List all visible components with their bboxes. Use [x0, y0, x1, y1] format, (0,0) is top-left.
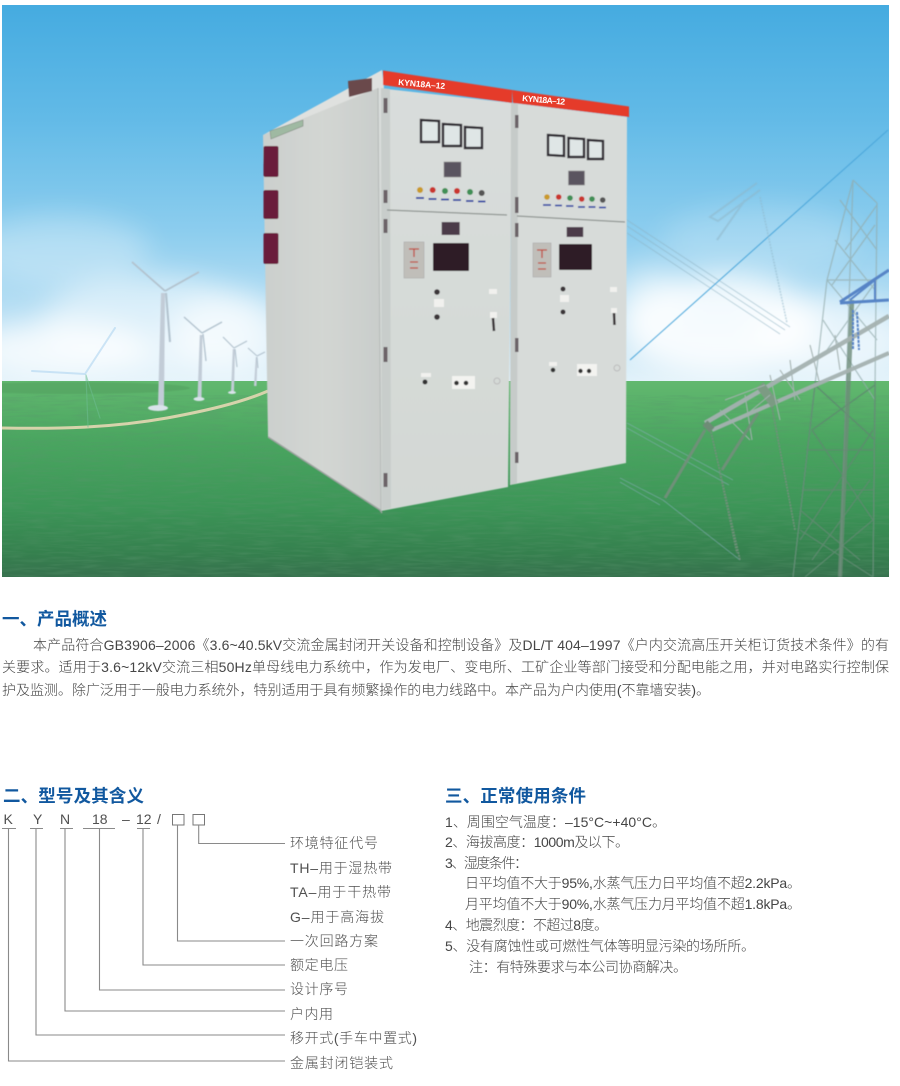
indicator lamps panel 1 [416, 187, 486, 202]
top vent [348, 78, 372, 97]
meaning labels: 移开式(手车中置式) [290, 1030, 417, 1046]
clouds [0, 205, 900, 378]
lattice tower, sky part [793, 180, 877, 577]
indicator lamps panel 2 [543, 194, 606, 208]
turbine 4 [248, 348, 265, 386]
distant hill [0, 382, 190, 394]
overview paragraph: 本产品符合GB3906–2006《3.6~40.5kV交流金属封闭开关设备和控制设备》及DL/T 404–1997《户内交流高压开关柜订货技术条件》的有 [33, 637, 889, 653]
meaning labels: 额定电压 [290, 957, 348, 973]
product: switchgear cabinet [263, 70, 629, 513]
conditions list [445, 814, 801, 975]
model code: N [60, 811, 70, 827]
knobs and handles [434, 286, 617, 331]
meaning labels [290, 835, 417, 1071]
model code: 12 [136, 811, 152, 827]
section 1: product overview [2, 609, 889, 698]
model code: 18 [92, 811, 108, 827]
turbine 2 [184, 317, 222, 401]
conditions list: 5、没有腐蚀性或可燃性气体等明显污染的场所所。 [445, 938, 755, 954]
blue wire [630, 130, 888, 360]
conditions list: 注：有特殊要求与本公司协商解决。 [469, 959, 687, 975]
transmission wires [620, 220, 790, 560]
pylon main arms [705, 316, 889, 440]
conditions list: 1、周围空气温度：–15°C~+40°C。 [445, 814, 666, 830]
conditions list: 2、海拔高度：1000m及以下。 [445, 834, 629, 850]
model code: – [122, 811, 130, 827]
meaning labels: 环境特征代号 [290, 835, 378, 851]
meaning labels: 设计序号 [290, 981, 348, 997]
meaning labels: 金属封闭铠装式 [290, 1055, 393, 1071]
heading: overview: 一、产品概述 [2, 609, 108, 629]
power pylon [620, 130, 889, 577]
center mast [840, 300, 852, 577]
heading: model meaning: 二、型号及其含义 [3, 786, 144, 806]
pylon struts and insulator chains [665, 407, 795, 560]
model code: Y [33, 811, 43, 827]
sky [2, 5, 889, 382]
model label 2: KYN18A–12 [522, 93, 566, 107]
overview paragraph: 关要求。适用于3.6~12kV交流三相50Hz单母线电力系统中，作为发电厂、变电所、工矿企业等部门接受和分配电能之用，并对电路实行控制保 [2, 659, 889, 675]
door windows panel 2 [533, 227, 592, 277]
cabinet top [263, 70, 384, 135]
turbine 3 [223, 337, 247, 394]
meaning labels: G–用于高海拔 [290, 909, 384, 925]
model code: / [157, 811, 161, 827]
meaning labels: 户内用 [290, 1006, 333, 1022]
maroon side boxes [264, 146, 278, 264]
leader lines [2, 825, 285, 1061]
front panel 2 [510, 103, 627, 485]
model label 1: KYN18A–12 [398, 77, 446, 91]
meaning labels: TH–用于湿热带 [290, 860, 392, 876]
turbine 1 [132, 262, 199, 411]
lower door sockets [421, 362, 620, 389]
conditions list: 3、湿度条件： [445, 855, 528, 871]
upper ghost arm [710, 183, 787, 323]
meters panel 1 [421, 120, 482, 148]
meaning labels: 一次回路方案 [290, 933, 378, 949]
meters panel 2 [548, 135, 603, 159]
heading: conditions: 三、正常使用条件 [445, 786, 586, 806]
model code: K [4, 811, 14, 827]
green nameplate [270, 120, 303, 139]
grass field [2, 381, 889, 577]
section 3: normal operating conditions [445, 786, 801, 975]
conditions list: 月平均值不大于90%,水蒸气压力月平均值不超1.8kPa。 [465, 896, 801, 912]
ghost wind turbine [32, 328, 115, 427]
cabinet side panel [263, 88, 381, 510]
frame posts [381, 88, 391, 510]
front panel 1 [378, 88, 512, 511]
hero image: switchgear in a wind-farm landscape [0, 5, 900, 577]
door seams [387, 210, 625, 222]
conditions list: 日平均值不大于95%,水蒸气压力日平均值不超2.2kPa。 [465, 875, 801, 891]
section 2: model designation [2, 786, 417, 1071]
red header strip 1 [383, 70, 512, 103]
red header strip 2 [512, 90, 629, 117]
conditions list: 4、地震烈度：不超过8度。 [445, 917, 608, 933]
meaning labels: TA–用于干热带 [290, 884, 391, 900]
controllers [444, 162, 461, 177]
overview paragraph [2, 637, 889, 698]
lattice tower, field part [792, 380, 876, 577]
model code [4, 811, 204, 827]
door windows panel 1 [404, 222, 469, 278]
road [2, 391, 268, 428]
overview paragraph: 护及监测。除广泛用于一般电力系统外，特别适用于具有频繁操作的电力线路中。本产品为户内使用(不靠墙安装)。 [2, 682, 710, 698]
hinges [384, 98, 518, 487]
blue cross arm [840, 270, 889, 350]
wind turbines row [132, 262, 265, 411]
